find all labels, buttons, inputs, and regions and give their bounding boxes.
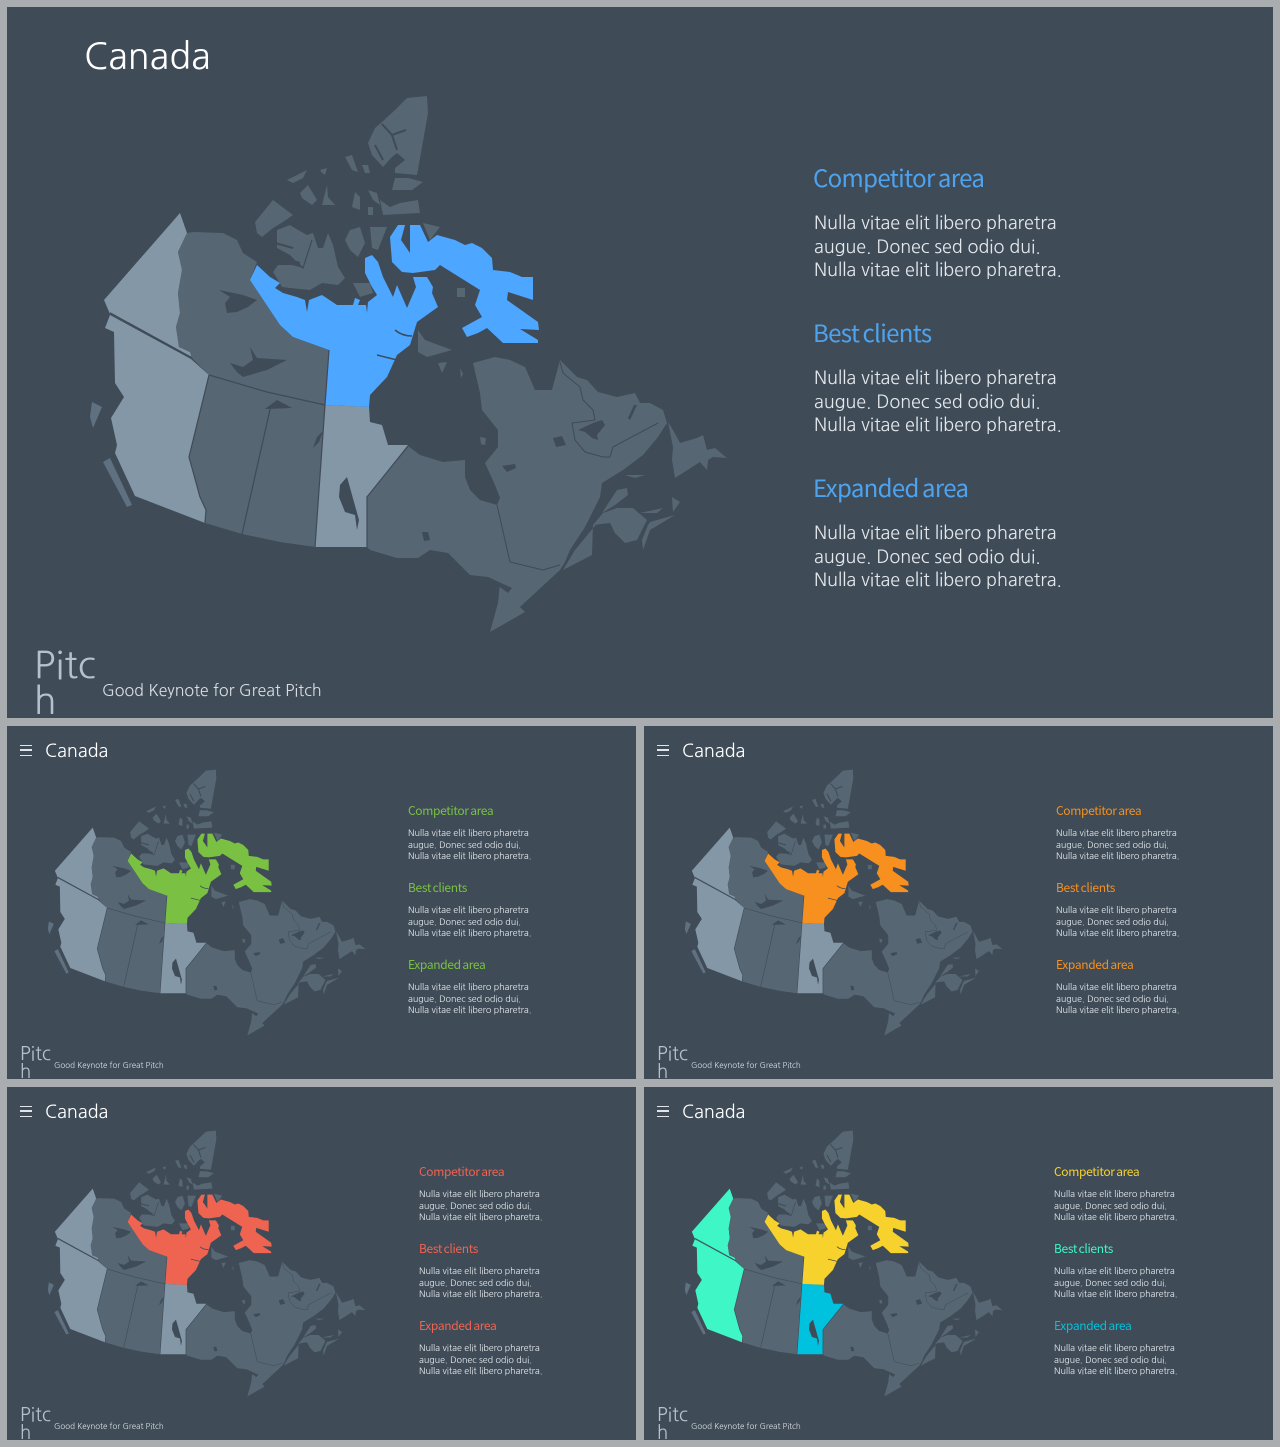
- footer brand: Pitc: [657, 1405, 688, 1424]
- legend: competitor text: [419, 1190, 542, 1222]
- legend: competitor heading: Competitor area: [419, 1163, 504, 1180]
- legend: best clients text: [408, 906, 531, 938]
- panel: green slide: [7, 726, 636, 1079]
- legend: expanded text: Nulla vitae elit libero pharetra: [419, 1344, 540, 1353]
- footer tagline: Good Keynote for Great Pitch: [102, 683, 322, 699]
- legend: best clients text: Nulla vitae elit libero pharetra: [408, 906, 529, 915]
- legend: expanded text: Nulla vitae elit libero pharetra: [1054, 1344, 1175, 1353]
- footer brand: [20, 1044, 51, 1079]
- legend: competitor text: Nulla vitae elit libero pharetra.: [814, 261, 1062, 279]
- legend: best clients text: Nulla vitae elit libero pharetra: [1056, 906, 1177, 915]
- map: orange Nunavut: [684, 770, 1002, 1036]
- legend: expanded heading: Expanded area: [1054, 1317, 1131, 1334]
- legend: expanded text: augue. Donec sed odio dui.: [408, 994, 521, 1004]
- legend: competitor text: Nulla vitae elit libero pharetra: [1056, 829, 1177, 838]
- title: Canada: [84, 39, 211, 75]
- legend: competitor text: Nulla vitae elit libero pharetra: [814, 214, 1056, 232]
- map: red Nunavut: [48, 1130, 365, 1396]
- legend: best clients text: Nulla vitae elit libero pharetra.: [1054, 1290, 1177, 1299]
- map: green Nunavut: [48, 770, 365, 1036]
- legend: expanded text: Nulla vitae elit libero pharetra.: [814, 571, 1062, 589]
- icon: menu: [657, 1106, 669, 1117]
- title: Canada: [45, 742, 108, 760]
- legend: competitor text: Nulla vitae elit libero pharetra.: [408, 852, 531, 861]
- footer brand: [20, 1405, 51, 1440]
- map: Canada with blue Nunavut: [90, 96, 727, 632]
- legend: expanded text: Nulla vitae elit libero pharetra.: [419, 1367, 542, 1376]
- panel: red slide: [7, 1087, 636, 1440]
- legend: expanded heading: Expanded area: [419, 1317, 496, 1334]
- legend: best clients text: augue. Donec sed odio dui.: [1056, 918, 1169, 926]
- legend: expanded text: Nulla vitae elit libero pharetra: [1056, 983, 1177, 992]
- legend: best clients heading: Best clients: [813, 314, 932, 349]
- legend: best clients text: Nulla vitae elit libero pharetra: [419, 1267, 540, 1276]
- footer brand: Pitc: [20, 1405, 51, 1424]
- panel: main blue slide: [7, 7, 1273, 718]
- legend: competitor text: [408, 829, 531, 861]
- legend: competitor text: Nulla vitae elit libero pharetra: [1054, 1190, 1175, 1199]
- legend: competitor text: augue. Donec sed odio dui.: [1056, 840, 1169, 850]
- legend: competitor text: augue. Donec sed odio dui.: [408, 840, 521, 850]
- legend: competitor heading: Competitor area: [408, 802, 493, 819]
- legend: best clients text: Nulla vitae elit libero pharetra.: [1056, 929, 1179, 938]
- legend: best clients text: augue. Donec sed odio dui.: [408, 918, 521, 926]
- legend: competitor text: Nulla vitae elit libero pharetra.: [1054, 1213, 1177, 1222]
- legend: competitor heading: Competitor area: [1056, 802, 1141, 819]
- legend: competitor text: [814, 214, 1062, 279]
- legend: competitor text: Nulla vitae elit libero pharetra.: [1056, 852, 1179, 861]
- footer tagline: Good Keynote for Great Pitch: [54, 1062, 164, 1070]
- legend: expanded text: augue. Donec sed odio dui.: [1054, 1356, 1167, 1364]
- legend: best clients heading: Best clients: [1056, 879, 1115, 896]
- legend: expanded text: [408, 983, 531, 1015]
- footer brand: Pitc: [34, 647, 96, 684]
- footer brand: Pitc: [657, 1044, 688, 1063]
- legend: competitor text: augue. Donec sed odio dui.: [814, 238, 1041, 256]
- legend: best clients text: Nulla vitae elit libero pharetra.: [419, 1290, 542, 1299]
- legend: best clients text: augue. Donec sed odio dui.: [814, 392, 1041, 410]
- legend: competitor text: Nulla vitae elit libero pharetra.: [419, 1213, 542, 1222]
- legend: expanded text: Nulla vitae elit libero pharetra.: [1054, 1367, 1177, 1376]
- legend: competitor text: [1056, 829, 1179, 861]
- legend: expanded text: augue. Donec sed odio dui.: [814, 548, 1041, 566]
- legend: expanded text: augue. Donec sed odio dui.: [419, 1356, 532, 1364]
- legend: expanded text: Nulla vitae elit libero pharetra: [814, 524, 1056, 542]
- legend: expanded text: [814, 524, 1062, 589]
- legend: best clients heading: Best clients: [408, 879, 467, 896]
- legend: expanded text: Nulla vitae elit libero pharetra.: [1056, 1006, 1179, 1015]
- footer tagline: Good Keynote for Great Pitch: [691, 1423, 801, 1431]
- footer brand: [657, 1044, 688, 1079]
- legend: best clients text: Nulla vitae elit libero pharetra.: [408, 929, 531, 938]
- title: Canada: [682, 742, 745, 760]
- legend: best clients text: Nulla vitae elit libero pharetra: [1054, 1267, 1175, 1276]
- legend: best clients text: Nulla vitae elit libero pharetra.: [814, 416, 1062, 434]
- legend: competitor text: [1054, 1190, 1177, 1222]
- legend: best clients text: [1056, 906, 1179, 938]
- legend: competitor heading: Competitor area: [1054, 1163, 1139, 1180]
- footer brand: [34, 647, 96, 718]
- legend: expanded heading: Expanded area: [408, 956, 485, 973]
- legend: best clients text: [814, 369, 1062, 434]
- legend: competitor text: augue. Donec sed odio dui.: [419, 1202, 532, 1210]
- legend: expanded heading: Expanded area: [1056, 956, 1133, 973]
- legend: expanded text: Nulla vitae elit libero pharetra.: [408, 1006, 531, 1015]
- legend: best clients text: [419, 1267, 542, 1299]
- title: Canada: [682, 1103, 745, 1121]
- map: yellow, teal and cyan regions: [684, 1130, 1002, 1396]
- legend: best clients text: augue. Donec sed odio dui.: [419, 1278, 532, 1288]
- icon: menu: [20, 1106, 32, 1117]
- legend: best clients heading: Best clients: [1054, 1240, 1113, 1257]
- icon: menu: [657, 745, 669, 756]
- legend: expanded text: augue. Donec sed odio dui.: [1056, 994, 1169, 1004]
- legend: expanded text: [1054, 1344, 1177, 1376]
- legend: best clients heading: Best clients: [419, 1240, 478, 1257]
- legend: best clients text: augue. Donec sed odio dui.: [1054, 1278, 1167, 1288]
- legend: competitor text: Nulla vitae elit libero pharetra: [408, 829, 529, 838]
- legend: expanded text: [1056, 983, 1179, 1015]
- legend: competitor text: Nulla vitae elit libero pharetra: [419, 1190, 540, 1199]
- legend: expanded text: [419, 1344, 542, 1376]
- legend: best clients text: [1054, 1267, 1177, 1299]
- legend: best clients text: Nulla vitae elit libero pharetra: [814, 369, 1056, 387]
- footer tagline: Good Keynote for Great Pitch: [54, 1423, 164, 1431]
- panel: orange slide: [644, 726, 1273, 1079]
- legend: expanded heading: Expanded area: [813, 469, 968, 504]
- legend: competitor text: augue. Donec sed odio dui.: [1054, 1202, 1167, 1210]
- footer brand: [657, 1405, 688, 1440]
- title: Canada: [45, 1103, 108, 1121]
- footer brand: Pitc: [20, 1044, 51, 1063]
- footer tagline: Good Keynote for Great Pitch: [691, 1062, 801, 1070]
- panel: multicolour slide: [644, 1087, 1273, 1440]
- icon: menu: [20, 745, 32, 756]
- legend: expanded text: Nulla vitae elit libero pharetra: [408, 983, 529, 992]
- legend: competitor heading: Competitor area: [813, 159, 984, 194]
